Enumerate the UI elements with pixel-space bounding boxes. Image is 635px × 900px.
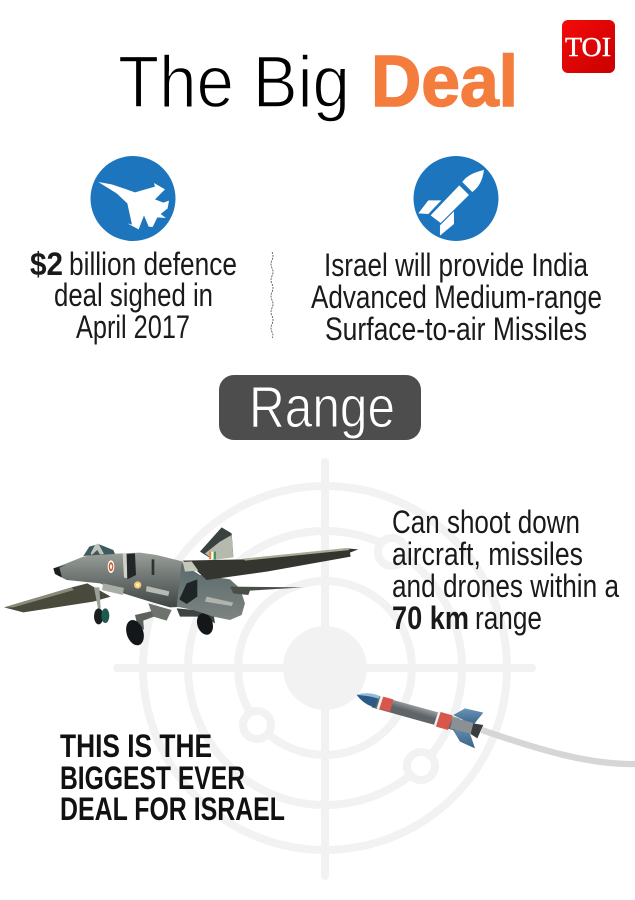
text block: range capability: range (475, 600, 542, 636)
callout: biggest deal: BIGGEST EVER (60, 760, 245, 796)
callout: biggest deal: THIS IS THE (60, 728, 212, 764)
text block: range capability: Can shoot down (392, 504, 580, 540)
missile with smoke trail (357, 693, 635, 764)
fighter aircraft (4, 527, 358, 648)
title (118, 42, 518, 123)
text block: missile supply: Surface-to-air Missiles (325, 311, 587, 347)
text block: deal value: $2 (30, 246, 63, 282)
text block: missile supply (311, 247, 602, 347)
text block: range capability: 70 km (392, 600, 469, 636)
heading: Range: Range (249, 375, 395, 440)
icon: fighter jet (90, 156, 176, 241)
icon: rocket (414, 156, 498, 241)
text block: deal value: April 2017 (76, 309, 190, 345)
text block: deal value (30, 246, 237, 345)
logo: TOI (562, 20, 615, 73)
title: The Big (118, 42, 350, 123)
target crosshair (117, 462, 532, 876)
text block: range capability (392, 504, 619, 636)
callout: biggest deal: DEAL FOR ISRAEL (60, 791, 285, 827)
text block: deal value: deal sighed in (54, 277, 213, 313)
title: Deal (371, 42, 518, 122)
text block: deal value: billion defence (69, 246, 237, 282)
logo: TOI: TOI (565, 32, 611, 62)
callout: biggest deal (60, 728, 285, 827)
text block: range capability: aircraft, missiles (392, 536, 583, 572)
